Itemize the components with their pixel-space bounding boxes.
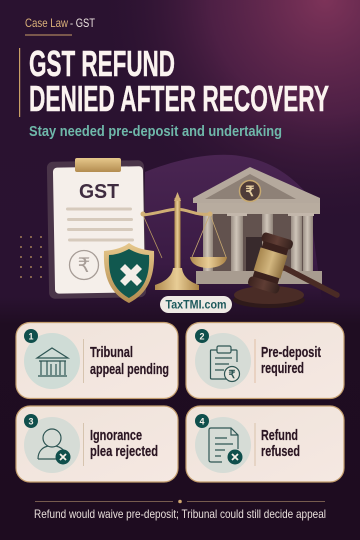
clip [75, 158, 121, 172]
rupee stamp: ₹ [78, 255, 90, 277]
badge 1 [24, 329, 38, 343]
card 2 text: required [261, 360, 304, 377]
rupee stamp [70, 250, 98, 280]
badge 3 [24, 414, 38, 428]
kicker: Case Law - GST: - GST [70, 16, 96, 30]
card 4 text [261, 427, 300, 460]
card 1 text [90, 344, 169, 378]
icon: bank building: ₹ [246, 183, 255, 199]
icon: document with X [209, 428, 242, 464]
panel: card 3 ignorance plea rejected [16, 406, 178, 482]
title accent bar [19, 48, 20, 117]
icon: clipboard with GST document [47, 158, 146, 299]
badge 4 [195, 414, 209, 428]
decorative dots left [20, 236, 42, 278]
card 1 text: appeal pending [90, 361, 169, 378]
badge: TaxTMI.com: TaxTMI.com [166, 300, 226, 312]
kicker: Case Law - GST [25, 16, 96, 36]
icon: clipboard with rupee [210, 346, 240, 382]
card 3 text: Ignorance [90, 427, 142, 444]
panel: card 2 pre-deposit required: ₹ [228, 369, 236, 381]
icon: tribunal building [37, 348, 68, 376]
document lines [66, 208, 134, 242]
title [29, 43, 329, 119]
card 3 text [90, 427, 158, 460]
icon: shield with X [104, 243, 154, 303]
title: GST REFUND [29, 43, 175, 84]
icon: gavel [233, 232, 337, 308]
badge 2 [195, 329, 209, 343]
panel: card 2 pre-deposit required [186, 322, 344, 398]
icon: bank building [193, 167, 322, 284]
footer divider [35, 500, 325, 503]
card 2 text [261, 344, 321, 377]
panel: card 1 tribunal appeal pending [16, 322, 178, 398]
GST label: GST [79, 181, 119, 203]
icon: person with X [38, 429, 70, 464]
card 4 text: refused [261, 443, 300, 460]
badge: TaxTMI.com [160, 296, 232, 313]
badge 1: 1 [28, 332, 34, 342]
kicker: Case Law - GST: Case Law [25, 16, 68, 30]
badge 4: 4 [199, 416, 205, 426]
card 4 text: Refund [261, 427, 298, 444]
panel: card 4 refund refused [186, 406, 344, 482]
card 2 text: Pre-deposit [261, 344, 321, 361]
icon: balance scale [140, 192, 227, 290]
card 3 text: plea rejected [90, 443, 158, 460]
card 1 text: Tribunal [90, 344, 133, 361]
badge 3: 3 [28, 416, 34, 426]
subtitle: Stay needed pre-deposit and undertaking [29, 124, 282, 140]
badge 2: 2 [199, 332, 205, 342]
